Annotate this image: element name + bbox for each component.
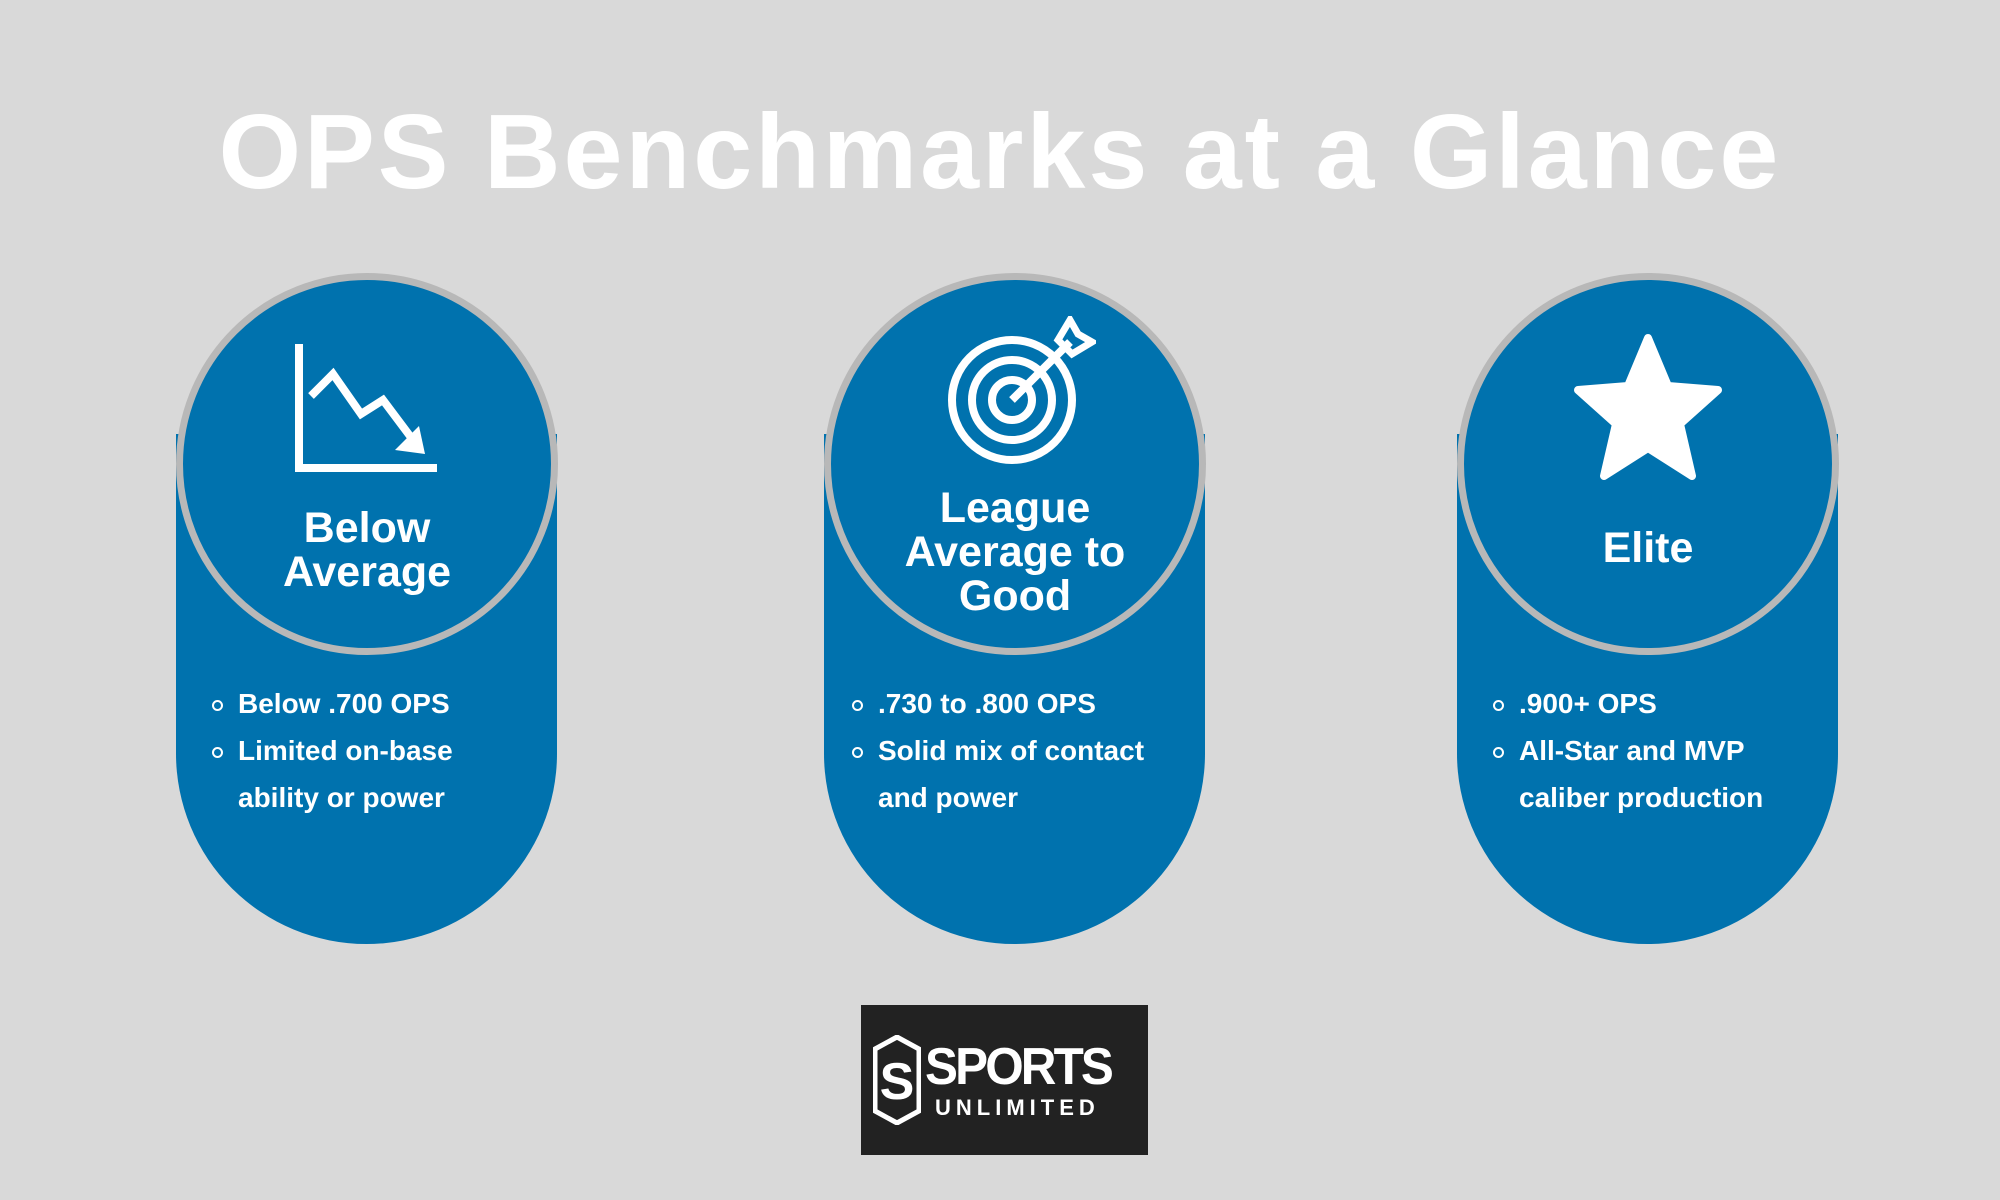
bullets: league average: and power	[878, 782, 1018, 813]
panel: below average	[176, 434, 557, 944]
bullets: below average	[212, 688, 453, 813]
icon: declining chart	[295, 344, 437, 472]
circle: elite	[1457, 273, 1839, 655]
bullets: elite: caliber production	[1519, 782, 1763, 813]
bullets: league average: Solid mix of contact	[878, 735, 1144, 766]
bullets: league average	[852, 688, 1144, 813]
circle: below average	[176, 273, 558, 655]
bullets: league average: .730 to .800 OPS	[878, 688, 1096, 719]
heading: elite: Elite	[1603, 524, 1693, 572]
title: OPS Benchmarks at a Glance	[219, 93, 1781, 211]
panel: league average	[824, 434, 1205, 944]
bullets: below average: Limited on-base	[238, 735, 453, 766]
logo text: SPORTS	[925, 1038, 1111, 1096]
logo: sports unlimited	[861, 1005, 1148, 1155]
heading: league average to good	[905, 484, 1125, 620]
icon: target	[948, 316, 1096, 464]
bullets: below average: Below .700 OPS	[238, 688, 450, 719]
logo icon: S	[880, 1053, 914, 1111]
heading: below average	[283, 504, 451, 596]
bullets: elite: All-Star and MVP	[1519, 735, 1745, 766]
circle: league average	[824, 273, 1206, 655]
heading: league average to good: Average to	[905, 528, 1125, 576]
logo: sports unlimited: UNLIMITED	[935, 1095, 1100, 1120]
panel: elite	[1457, 434, 1838, 944]
icon: star	[1574, 334, 1722, 480]
heading: league average to good: Good	[959, 572, 1071, 620]
bullets: elite: .900+ OPS	[1519, 688, 1657, 719]
bullets: below average: ability or power	[238, 782, 445, 813]
heading: below average: Below	[304, 504, 430, 552]
bullets: elite	[1493, 688, 1763, 813]
heading: league average to good: League	[940, 484, 1090, 532]
logo icon	[873, 1035, 921, 1125]
heading: below average: Average	[283, 548, 451, 596]
